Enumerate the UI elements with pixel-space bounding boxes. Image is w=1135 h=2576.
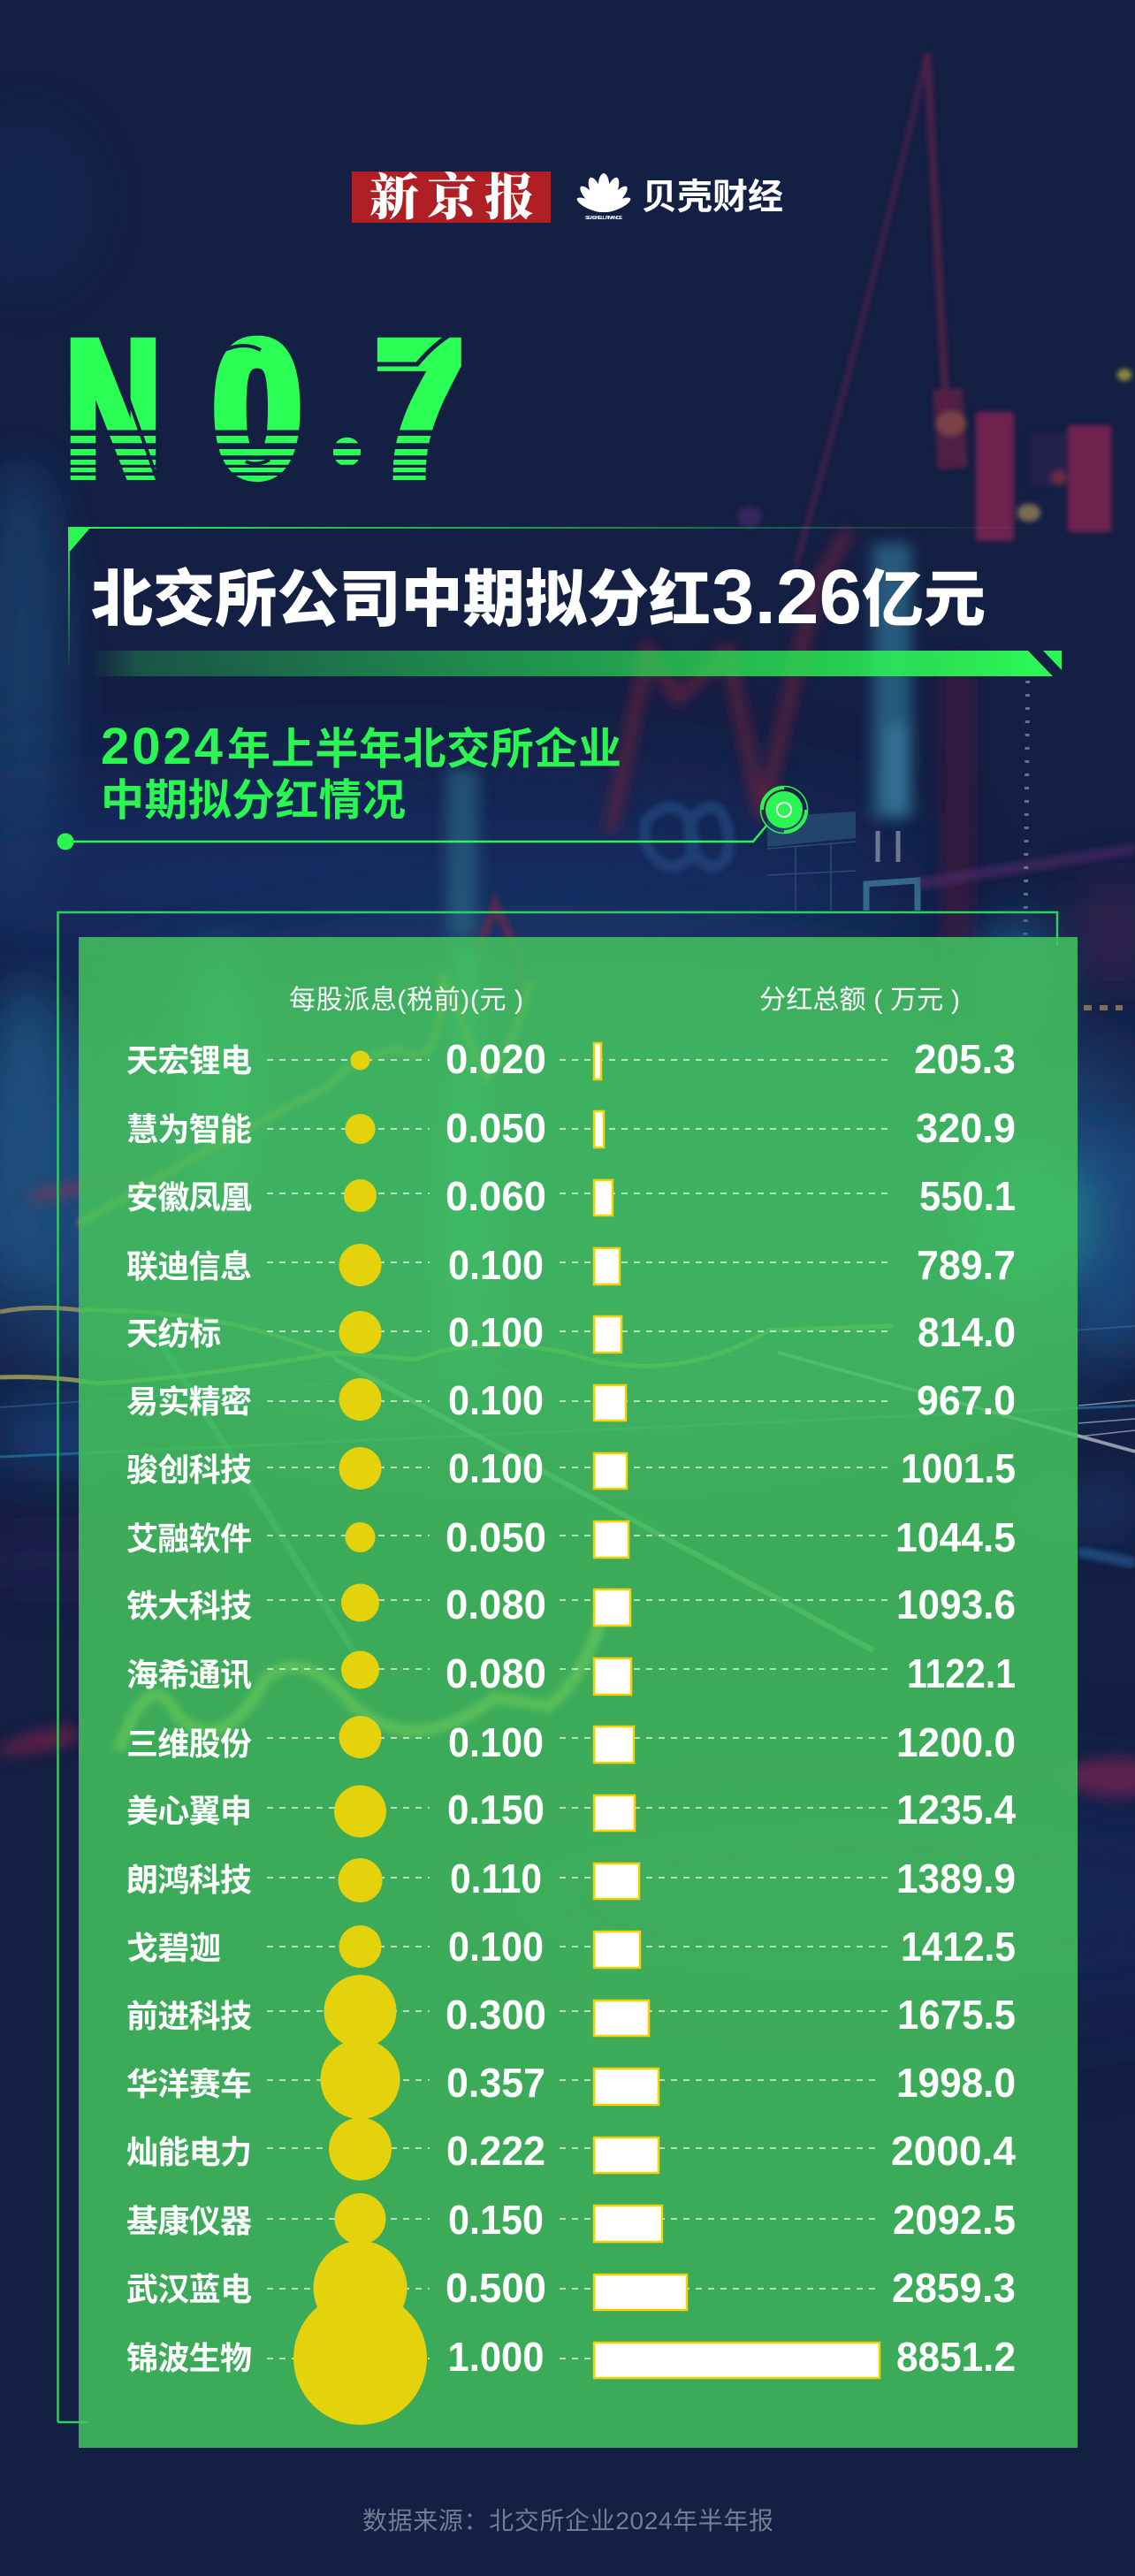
row: 华洋赛车 [126,2039,1016,2119]
row: 铁大科技: 0.080 [446,1581,546,1627]
icon: shell: SEASHELL FINANCE [585,216,622,221]
row: 三维股份: 1200.0 [896,1719,1016,1765]
row: 海希通讯 [126,1650,1016,1696]
row: 华洋赛车: 0.357 [446,2060,545,2106]
headline: NO.7 striped lettering: N [66,303,160,514]
row: 美心翼申: 1235.4 [896,1787,1016,1833]
row: 前进科技: 1675.5 [897,1992,1016,2038]
row: 美心翼申: 美心翼申 [126,1793,252,1829]
row: 天纺标 [126,1309,1016,1355]
row: 基康仪器: 基康仪器 [126,2203,252,2239]
row: 海希通讯: 1122.1 [907,1650,1016,1696]
title frame lines [69,527,1047,529]
row: 基康仪器: 2092.5 [893,2197,1016,2243]
row: 锦波生物: 1.000 [447,2334,545,2380]
row: 美心翼申 [126,1786,1016,1837]
subtitle: 中期拟分红情况 [101,777,406,825]
title text: 3.26 [712,554,862,640]
column header: total dividend: 分红总额 ( 万元 ) [759,986,960,1015]
row: 铁大科技: 1093.6 [896,1581,1016,1627]
subtitle underline with nodes [57,787,808,850]
row: 锦波生物 [126,2291,1016,2425]
panel: dividend table [79,937,1078,2448]
icon: target node [760,787,808,833]
row: 骏创科技: 1001.5 [901,1445,1016,1491]
row: 戈碧迦: 1412.5 [901,1924,1016,1970]
column header: dividend per share: 每股派息(税前)(元 ) [289,986,523,1015]
row: 艾融软件 [126,1514,1016,1560]
row: 联迪信息 [126,1242,1016,1288]
row: 天宏锂电: 0.020 [446,1036,546,1082]
row: 戈碧迦 [126,1924,1016,1970]
row: 武汉蓝电: 0.500 [446,2265,546,2311]
title banner [68,527,1062,676]
row: 朗鸿科技: 1389.9 [896,1856,1016,1902]
row: 艾融软件: 0.050 [446,1514,546,1560]
subtitle: 2024 [101,718,223,775]
subtitle: 年上半年北交所企业 [227,726,621,774]
logo: Beike Finance shell: 贝壳财经 [642,178,783,217]
row: 基康仪器 [126,2193,1016,2244]
row: 天宏锂电: 205.3 [914,1036,1016,1082]
row: 武汉蓝电 [126,2241,1016,2335]
row: 三维股份: 三维股份 [126,1726,252,1762]
logo: Beike Finance shell [575,173,783,221]
bar end triangle [1043,651,1062,670]
row: 联迪信息: 0.100 [448,1242,544,1288]
row: 艾融软件: 艾融软件 [126,1520,252,1557]
subtitle [101,718,621,825]
row: 戈碧迦: 戈碧迦 [126,1930,221,1966]
row: 易实精密: 967.0 [917,1377,1016,1423]
chart outer frame [58,912,1057,2422]
row: 华洋赛车: 1998.0 [896,2060,1016,2106]
row: 天纺标: 814.0 [918,1309,1016,1355]
title corner triangle [69,527,91,553]
row: 三维股份: 0.100 [448,1719,544,1765]
row: 前进科技: 前进科技 [126,1998,252,2034]
row: 灿能电力 [126,2118,1016,2180]
row: 前进科技 [126,1975,1016,2047]
row: 朗鸿科技: 0.110 [450,1856,542,1902]
row: 朗鸿科技 [126,1856,1016,1902]
row: 铁大科技: 铁大科技 [126,1588,252,1624]
row: 易实精密 [126,1377,1016,1423]
title text: 北交所公司中期拟分红 [91,565,711,634]
row: 天纺标: 0.100 [448,1309,544,1355]
row: 戈碧迦: 0.100 [448,1924,544,1970]
row: 海希通讯: 海希通讯 [126,1657,252,1693]
row: 武汉蓝电: 武汉蓝电 [126,2271,252,2307]
row: 安徽凤凰: 0.060 [446,1173,546,1219]
row: 天宏锂电 [126,1036,1016,1082]
row: 慧为智能: 0.050 [446,1105,546,1151]
row: 美心翼申: 0.150 [447,1787,545,1833]
green gradient bar [90,651,1053,676]
row: 前进科技: 0.300 [446,1992,546,2038]
row: 海希通讯: 0.080 [446,1650,546,1696]
row: 易实精密: 0.100 [448,1377,544,1423]
row: 骏创科技: 0.100 [448,1445,544,1491]
title text: 亿元 [862,565,986,634]
headline: NO.7 striped lettering: . [323,290,371,507]
row: 艾融软件: 1044.5 [895,1514,1016,1560]
row: 联迪信息: 联迪信息 [126,1248,252,1284]
row: 慧为智能 [126,1105,1016,1151]
logo: Xinjingbao red masthead: 新京报 [369,159,534,230]
row: 华洋赛车: 华洋赛车 [126,2066,252,2102]
row: 天宏锂电: 天宏锂电 [126,1042,252,1078]
source note: 数据来源：北交所企业2024年半年报 [362,2507,773,2534]
headline: NO.7 striped lettering: 7 [376,302,463,514]
row: 灿能电力: 2000.4 [891,2128,1016,2174]
row: 三维股份 [126,1716,1016,1765]
row: 武汉蓝电: 2859.3 [892,2265,1016,2311]
row: 灿能电力: 0.222 [446,2128,545,2174]
row: 联迪信息: 789.7 [917,1242,1016,1288]
row: 锦波生物: 锦波生物 [126,2340,252,2376]
row: 朗鸿科技: 朗鸿科技 [126,1862,252,1898]
row: 慧为智能: 320.9 [916,1105,1016,1151]
row: 骏创科技 [126,1445,1016,1491]
row: 骏创科技: 骏创科技 [126,1452,252,1488]
row: 铁大科技 [126,1581,1016,1627]
row: 天纺标: 天纺标 [126,1315,221,1352]
row: 安徽凤凰: 550.1 [919,1173,1016,1219]
row: 安徽凤凰 [126,1173,1016,1219]
row: 锦波生物: 8851.2 [896,2334,1016,2380]
row: 灿能电力: 灿能电力 [126,2134,252,2170]
row: 安徽凤凰: 安徽凤凰 [126,1179,252,1216]
headline: NO.7 striped lettering [71,336,461,483]
row: 基康仪器: 0.150 [448,2197,544,2243]
row: 慧为智能: 慧为智能 [126,1111,252,1147]
icon: shell [575,173,632,221]
row: 易实精密: 易实精密 [126,1383,252,1420]
headline: NO.7 striped lettering: 0 [213,302,301,514]
